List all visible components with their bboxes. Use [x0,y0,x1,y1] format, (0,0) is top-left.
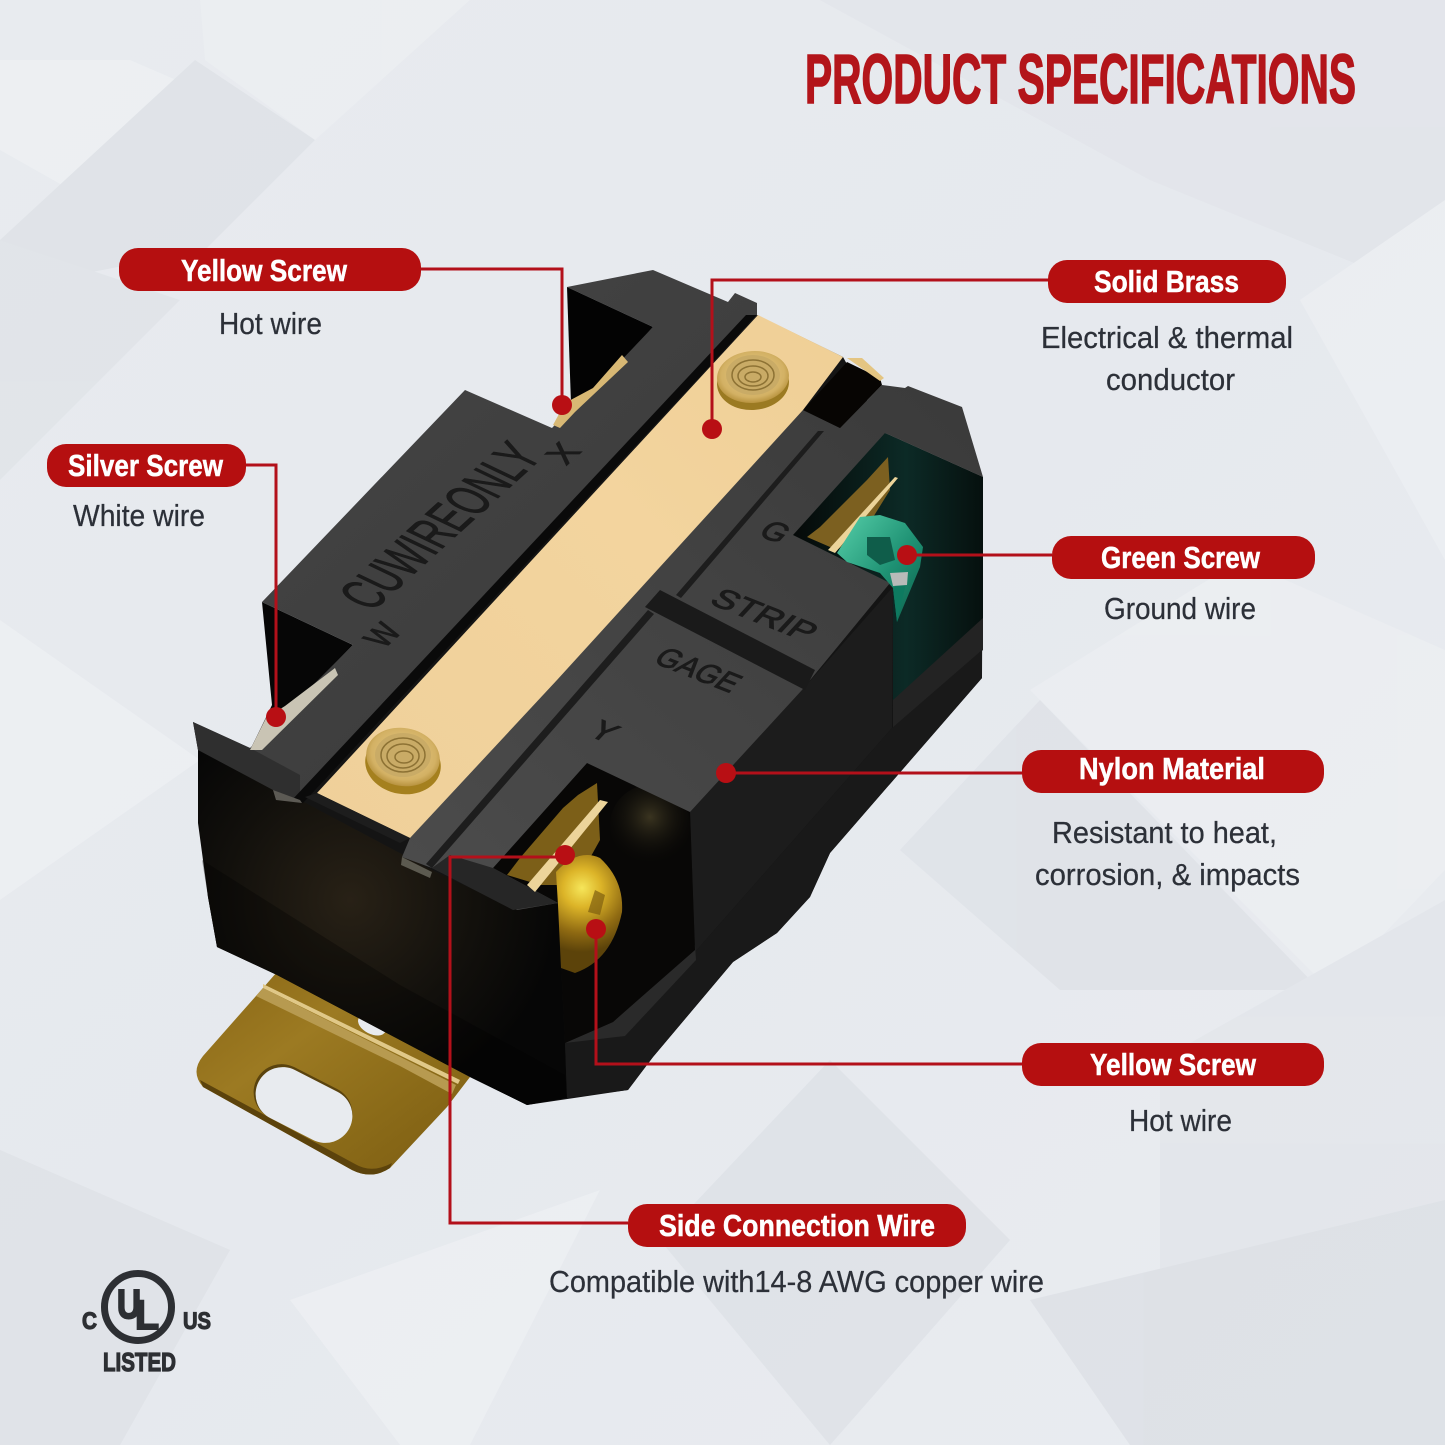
disc bottom [360,722,446,800]
front lower step [202,860,567,1105]
left contact [250,668,338,750]
front contact and screw [507,783,622,973]
side lip [565,945,696,1043]
callout: solid brass [1041,260,1293,397]
top recess [567,287,653,404]
rail end tab [273,790,302,803]
callout: green screw [1052,536,1315,626]
side wall [690,587,893,952]
callout: yellow screw top: Hot wire [219,306,322,341]
leader: yellow screw bottom [586,919,1022,1064]
leader: nylon material [716,763,1022,783]
callout: nylon material [1022,750,1324,892]
certification: cUL US listed: C [82,1308,97,1335]
callout: side connection wire: Side Connection Wire [659,1208,935,1243]
callout: yellow screw top: Yellow Screw [181,253,348,288]
right recess [790,433,983,735]
callout: green screw: Ground wire [1104,591,1256,626]
callout: silver screw [47,444,246,533]
callout: nylon material: Nylon Material [1079,751,1265,786]
certification: cUL US listed: US [183,1308,211,1335]
leader: side connection wire [450,845,628,1223]
callout: nylon material: Resistant to heat, [1052,815,1277,850]
callout: solid brass: conductor [1106,362,1235,397]
notch behind brass [803,362,882,428]
certification: cUL US listed: LISTED [103,1347,176,1377]
disc top [715,349,791,412]
certification: cUL US listed: L [135,1292,159,1338]
front face [193,722,567,1105]
callout: side connection wire: Compatible with14-8 AWG copper wire [549,1264,1044,1299]
leader: silver screw [246,465,286,727]
certification: cUL US listed: U [117,1281,141,1327]
embossed lettering: STRIP [703,583,826,647]
leader: yellow screw top [421,269,572,415]
top contact [553,355,628,428]
brass glimpse [847,358,884,381]
callout: solid brass: Electrical & thermal [1041,320,1293,355]
brass bar [317,315,843,838]
front recess [493,763,695,1043]
body silhouette [198,315,983,1105]
callout: yellow screw bottom: Hot wire [1129,1103,1232,1138]
embossed lettering: X [536,437,590,469]
ground contact and green screw [807,457,923,622]
callout: side connection wire [549,1204,1044,1299]
callout: green screw: Green Screw [1101,540,1261,575]
right front bevel [432,855,558,910]
embossed lettering: W [354,617,411,652]
mounting bracket [196,972,470,1175]
left recess [250,602,353,750]
front chamfer [193,722,300,800]
left rail groove [292,315,757,803]
callout: yellow screw bottom [1022,1043,1324,1138]
embossed lettering: CUWIREONLY [326,435,555,618]
brass under edge [305,793,410,843]
lower collar [565,650,982,1098]
embossed lettering: Y [582,715,627,748]
embossed lettering [326,435,826,748]
left top face [193,270,757,800]
right top face [402,385,983,910]
product: locking receptacle [193,270,983,1175]
callout: yellow screw bottom: Yellow Screw [1090,1047,1257,1082]
embossed lettering: G [752,515,798,549]
certification: cUL US listed [82,1274,211,1377]
leader: green screw [897,545,1052,565]
embossed lettering: GAGE [647,642,749,698]
callout: silver screw: White wire [73,498,205,533]
callout: silver screw: Silver Screw [68,448,224,483]
callout: yellow screw top [119,248,421,341]
callout: solid brass: Solid Brass [1094,264,1239,299]
leader: solid brass [702,280,1048,439]
recess light [610,785,690,865]
grooves [401,431,824,878]
callout: nylon material: corrosion, & impacts [1035,857,1300,892]
